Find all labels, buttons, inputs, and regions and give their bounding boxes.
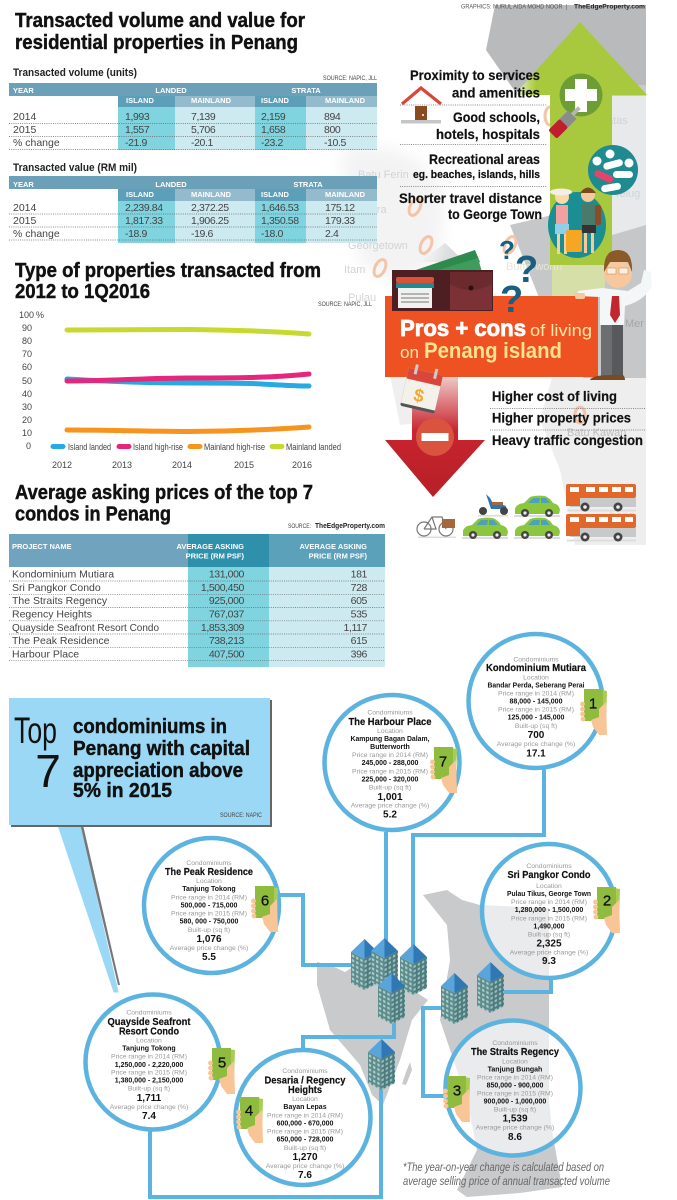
map background: pros and cons panel bbox=[340, 5, 646, 545]
heading: transacted volume and value bbox=[15, 9, 305, 54]
line chart: property types: 30 bbox=[22, 402, 32, 412]
circle 7: The Harbour Place bbox=[324, 695, 460, 830]
table: asking prices: PRICE (RM PSF) bbox=[186, 552, 244, 560]
circle 6: The Peak Residence: 6 bbox=[261, 892, 269, 910]
table: asking prices: The Straits Regency bbox=[12, 595, 108, 607]
heading: transacted volume and value: Transacted volume and value for bbox=[15, 9, 305, 32]
circle 3: The Straits Regency: 1,539 bbox=[502, 1114, 528, 1124]
panel: pros and cons banner: Penang island bbox=[424, 338, 562, 363]
callout: top 7 condominiums bbox=[9, 698, 272, 827]
icon: calendar: $ bbox=[412, 385, 426, 407]
table: asking prices: Harbour Place bbox=[12, 648, 79, 660]
line chart: property types: 50 bbox=[22, 376, 32, 386]
table: transacted value: MAINLAND bbox=[191, 190, 232, 199]
panel: pros and cons banner: Pros + cons bbox=[400, 315, 526, 341]
panel: pros and cons banner: of living bbox=[530, 321, 592, 340]
circle 5: Quayside Seafront Resort Condo bbox=[86, 994, 235, 1130]
map: Penang mainland and island bbox=[317, 890, 562, 1197]
table: asking prices: 396 bbox=[351, 648, 368, 660]
table: transacted value: -18.9 bbox=[125, 228, 147, 240]
map background: pros and cons panel: Batu Kawan bbox=[567, 427, 626, 439]
circle 2: Sri Pangkor Condo: Location bbox=[536, 883, 562, 890]
circle 4: Desaria / Regency Heights: Location bbox=[292, 1096, 318, 1103]
callout: top 7 condominiums: SOURCE: NAPIC bbox=[220, 812, 262, 819]
table: transacted volume bbox=[9, 67, 377, 150]
circle 7: The Harbour Place: The Harbour Place bbox=[348, 717, 432, 728]
callout: top 7 condominiums: Penang with capital bbox=[73, 738, 250, 760]
circle 4: Desaria / Regency Heights: Price range in 2015 (RM) bbox=[267, 1128, 343, 1136]
cons list: Higher property prices bbox=[492, 410, 631, 426]
table: transacted volume: -10.5 bbox=[324, 137, 346, 149]
line chart: property types: 40 bbox=[22, 389, 32, 399]
line chart: property types: 70 bbox=[22, 349, 32, 359]
icon: medical cross bbox=[560, 74, 602, 116]
circle 7: The Harbour Place: 5.2 bbox=[383, 810, 397, 820]
circle 4: Desaria / Regency Heights: Desaria / Regency bbox=[264, 1076, 346, 1086]
circle 5: Quayside Seafront Resort Condo: Tanjung Tokong bbox=[122, 1046, 176, 1052]
pros list: to George Town bbox=[448, 206, 542, 222]
pros list: Recreational areas bbox=[429, 151, 540, 167]
table: transacted volume: YEAR bbox=[13, 86, 34, 95]
table: asking prices: 407,500 bbox=[209, 648, 245, 660]
table: transacted value: ISLAND bbox=[261, 190, 290, 199]
circle 2: Sri Pangkor Condo: 2,325 bbox=[536, 938, 562, 950]
table: transacted value: -19.6 bbox=[191, 228, 213, 240]
circle 1: Kondominium Mutiara: Location bbox=[523, 674, 549, 682]
circle 1: Kondominium Mutiara: 88,000 - 145,000 bbox=[510, 698, 563, 706]
circle 2: Sri Pangkor Condo: Average price change (%) bbox=[510, 950, 588, 956]
circle 2: Sri Pangkor Condo: Pulau Tikus, George Town bbox=[507, 891, 591, 898]
circle 4: Desaria / Regency Heights: 1,270 bbox=[292, 1152, 318, 1163]
table: asking prices: Regency Heights bbox=[12, 608, 92, 620]
circle 1: Kondominium Mutiara: Price range in 2015 (RM) bbox=[498, 706, 574, 714]
circle 7: The Harbour Place: Location bbox=[377, 728, 403, 735]
table: asking prices: Sri Pangkor Condo bbox=[12, 582, 101, 594]
circle 3: The Straits Regency bbox=[443, 1020, 580, 1156]
panel: pros and cons banner bbox=[385, 296, 598, 377]
circle 4: Desaria / Regency Heights: Heights bbox=[288, 1085, 322, 1096]
callout: top 7 condominiums: condominiums in bbox=[73, 716, 227, 738]
callout: top 7 condominiums: 5% in 2015 bbox=[73, 780, 172, 802]
circle 2: Sri Pangkor Condo: Sri Pangkor Condo bbox=[508, 870, 590, 881]
circle 7: The Harbour Place: Butterworth bbox=[370, 744, 410, 751]
pros list: Good schools, bbox=[453, 109, 540, 125]
table: transacted value: % change bbox=[13, 228, 60, 240]
table: transacted volume: 2014 bbox=[13, 111, 37, 123]
circle 6: The Peak Residence: Tanjung Tokong bbox=[182, 886, 236, 893]
circle 4: Desaria / Regency Heights: 600,000 - 670,000 bbox=[277, 1120, 334, 1128]
footnote: *The year-on-year change is calculated based on bbox=[403, 1162, 604, 1174]
callout: top 7 condominiums: appreciation above bbox=[73, 760, 243, 782]
table: transacted volume: 1,993 bbox=[125, 111, 150, 123]
table: asking prices: 1,117 bbox=[344, 622, 368, 634]
table: asking prices: 605 bbox=[351, 595, 368, 607]
circle 5: Quayside Seafront Resort Condo: Price range in 2014 (RM) bbox=[111, 1054, 187, 1060]
table: asking prices: PROJECT NAME bbox=[12, 542, 72, 551]
circle 5: Quayside Seafront Resort Condo: Built-up (sq ft) bbox=[128, 1086, 170, 1092]
table: asking prices: 535 bbox=[351, 608, 368, 620]
table: transacted volume: 5,706 bbox=[191, 124, 216, 136]
pros list bbox=[399, 67, 547, 222]
line chart: property types: Island high-rise bbox=[133, 442, 183, 452]
circle 1: Kondominium Mutiara: 1 bbox=[589, 696, 597, 712]
table: asking prices: The Peak Residence bbox=[12, 635, 110, 647]
icon: question marks bbox=[499, 235, 538, 321]
circle 2: Sri Pangkor Condo: 2 bbox=[603, 892, 611, 910]
table: transacted value: 175.12 bbox=[325, 202, 355, 214]
table: transacted volume: MAINLAND bbox=[325, 96, 366, 105]
circle 5: Quayside Seafront Resort Condo: Average price change (%) bbox=[110, 1104, 188, 1111]
circle 6: The Peak Residence: The Peak Residence bbox=[165, 867, 253, 878]
footnote bbox=[403, 1162, 610, 1188]
pros list: eg. beaches, islands, hills bbox=[413, 169, 540, 181]
white fade on arrow wing bbox=[514, 71, 536, 95]
circle 5: Quayside Seafront Resort Condo: Quayside Seafront bbox=[108, 1017, 191, 1028]
circle 3: The Straits Regency: Price range in 2015 (RM) bbox=[477, 1090, 553, 1098]
table: transacted value: STRATA bbox=[293, 180, 323, 189]
table: transacted volume: 1,557 bbox=[125, 124, 150, 136]
circle 3: The Straits Regency: 8.6 bbox=[508, 1132, 522, 1143]
heading: type of properties: SOURCE: NAPIC, JLL bbox=[318, 301, 372, 308]
circle 6: The Peak Residence: Average price change (%) bbox=[170, 945, 248, 952]
table: transacted volume: -21.9 bbox=[125, 137, 147, 149]
connector lines bbox=[150, 768, 551, 1197]
circle 3: The Straits Regency: Average price change (%) bbox=[476, 1124, 554, 1132]
line chart: property types: 2015 bbox=[234, 460, 254, 470]
table: transacted value: LANDED bbox=[155, 180, 187, 189]
circle 4: Desaria / Regency Heights: Price range in 2014 (RM) bbox=[267, 1112, 343, 1120]
circle 2: Sri Pangkor Condo: 1,280,000 - 1,500,000 bbox=[515, 907, 583, 914]
circle 6: The Peak Residence: 5.5 bbox=[202, 952, 216, 963]
line chart: property types: 20 bbox=[22, 415, 32, 425]
table: transacted volume: 1,658 bbox=[261, 124, 286, 136]
line chart: property types: Island landed bbox=[68, 442, 111, 452]
table: transacted value: Transacted value (RM mil) bbox=[13, 162, 137, 174]
table: asking prices: 615 bbox=[351, 635, 368, 647]
credit line: TheEdgeProperty.com bbox=[574, 4, 645, 10]
circle 5: Quayside Seafront Resort Condo: 7.4 bbox=[142, 1111, 156, 1122]
icon: pills bbox=[588, 145, 638, 195]
circle 7: The Harbour Place: 1,001 bbox=[377, 792, 403, 803]
circle 3: The Straits Regency: 3 bbox=[453, 1082, 461, 1100]
circle 3: The Straits Regency: 900,000 - 1,000,000 bbox=[484, 1098, 546, 1106]
line chart: property types: 0 bbox=[26, 441, 31, 451]
circle 7: The Harbour Place: 7 bbox=[439, 754, 447, 770]
circle 1: Kondominium Mutiara: Built-up (sq ft) bbox=[515, 723, 557, 730]
circle 6: The Peak Residence: Condominiums bbox=[186, 860, 232, 867]
circle 7: The Harbour Place: 225,000 - 320,000 bbox=[362, 776, 419, 784]
table: transacted volume: 894 bbox=[324, 111, 341, 123]
credit line: GRAPHICS: NURUL AIDA MOHD NOOR | bbox=[461, 4, 567, 10]
table: transacted volume: ISLAND bbox=[261, 96, 290, 105]
circle 7: The Harbour Place: Built-up (sq ft) bbox=[369, 784, 411, 792]
heading: type of properties bbox=[15, 259, 372, 308]
icon: wallet with cash bbox=[392, 250, 493, 311]
line chart: property types: 10 bbox=[22, 428, 32, 438]
heading: average asking prices: condos in Penang bbox=[15, 502, 171, 526]
pros list: Shorter travel distance bbox=[399, 190, 542, 206]
table: asking prices: 181 bbox=[351, 568, 368, 580]
circle 4: Desaria / Regency Heights: Average price change (%) bbox=[266, 1163, 344, 1170]
table: asking prices: 1,500,450 bbox=[201, 582, 245, 594]
table: transacted value: 2014 bbox=[13, 202, 37, 214]
line chart: property types: 60 bbox=[22, 362, 32, 372]
circle 5: Quayside Seafront Resort Condo: 1,380,000 - 2,150,000 bbox=[115, 1078, 183, 1084]
table: transacted volume: SOURCE: NAPIC, JLL bbox=[323, 75, 377, 82]
circle 1: Kondominium Mutiara: 125,000 - 145,000 bbox=[508, 714, 565, 722]
callout: top 7 condominiums: 7 bbox=[35, 745, 61, 797]
icon: calendar bbox=[400, 363, 444, 414]
table: transacted value: 2,239.84 bbox=[125, 202, 163, 214]
table: transacted value: -18.0 bbox=[261, 228, 283, 240]
cons list: Higher cost of living bbox=[492, 388, 617, 404]
table: asking prices: AVERAGE ASKING bbox=[176, 542, 244, 551]
circle 4: Desaria / Regency Heights: 7.6 bbox=[298, 1170, 312, 1181]
circle 3: The Straits Regency: 850,000 - 900,000 bbox=[487, 1082, 544, 1090]
circle 7: The Harbour Place: Price range in 2015 (RM) bbox=[352, 768, 428, 776]
line chart: property types: 2013 bbox=[112, 460, 132, 470]
line chart: property types: Mainland landed bbox=[286, 442, 341, 452]
buildings bbox=[351, 938, 504, 1090]
circle 2: Sri Pangkor Condo: Price range in 2015 (RM) bbox=[511, 916, 587, 922]
icon: question marks: ? bbox=[499, 235, 515, 265]
heading: average asking prices bbox=[15, 481, 385, 530]
circle 2: Sri Pangkor Condo: Condominiums bbox=[526, 863, 572, 870]
circle 5: Quayside Seafront Resort Condo: Resort Condo bbox=[119, 1026, 179, 1038]
circle 3: The Straits Regency: Location bbox=[502, 1058, 528, 1066]
table: transacted volume: 7,139 bbox=[191, 111, 216, 123]
map background: pros and cons panel: atas bbox=[607, 115, 628, 127]
line chart: property types: 2016 bbox=[292, 460, 312, 470]
table: transacted volume: 2015 bbox=[13, 124, 37, 136]
cons list: Heavy traffic congestion bbox=[492, 432, 643, 448]
circle 1: Kondominium Mutiara: Bandar Perda, Seberang Perai bbox=[488, 682, 585, 690]
circle 4: Desaria / Regency Heights: Bayan Lepas bbox=[283, 1104, 327, 1111]
circle 6: The Peak Residence: Built-up (sq ft) bbox=[188, 927, 230, 934]
circle 4: Desaria / Regency Heights bbox=[236, 1050, 370, 1185]
table: transacted value: 179.33 bbox=[325, 215, 355, 227]
circle 1: Kondominium Mutiara: Condominiums bbox=[513, 656, 559, 664]
line chart: property types: % bbox=[36, 310, 44, 320]
table: transacted volume: STRATA bbox=[291, 86, 321, 95]
circle 6: The Peak Residence: Location bbox=[196, 878, 222, 885]
circle 5: Quayside Seafront Resort Condo: Location bbox=[136, 1038, 162, 1044]
table: asking prices: 1,853,309 bbox=[201, 622, 245, 634]
icon: tourists bbox=[548, 188, 606, 258]
heading: average asking prices: TheEdgeProperty.com bbox=[315, 523, 385, 530]
icon: question marks: ? bbox=[500, 279, 523, 321]
map background: pros and cons panel: Telug bbox=[614, 188, 640, 200]
callout: top 7 condominiums: Top bbox=[14, 710, 57, 751]
table: transacted value: 1,350.58 bbox=[261, 215, 299, 227]
red down arrow bbox=[385, 377, 485, 497]
circle 1: Kondominium Mutiara: Price range in 2014 (RM) bbox=[498, 690, 574, 698]
heading: average asking prices: SOURCE: bbox=[288, 523, 311, 530]
table: transacted value: 1,817.33 bbox=[125, 215, 163, 227]
table: transacted value: YEAR bbox=[13, 180, 34, 189]
heading: transacted volume and value: residential properties in Penang bbox=[15, 31, 298, 54]
icon: minus sign bbox=[416, 418, 454, 456]
table: asking prices: PRICE (RM PSF) bbox=[309, 552, 367, 560]
map background: pros and cons panel: Pulau bbox=[348, 292, 376, 304]
circle 4: Desaria / Regency Heights: Built-up (sq ft) bbox=[284, 1145, 326, 1152]
table: asking prices: Quayside Seafront Resort Condo bbox=[12, 622, 159, 634]
line chart: property types: 2014 bbox=[172, 460, 192, 470]
circle 6: The Peak Residence: 1,076 bbox=[196, 934, 222, 945]
table: transacted volume: MAINLAND bbox=[191, 96, 232, 105]
pros list: and amenities bbox=[452, 84, 540, 100]
line chart: property types: 2012 bbox=[52, 460, 72, 470]
circle 3: The Straits Regency: Price range in 2014 (RM) bbox=[477, 1074, 553, 1082]
circle 1: Kondominium Mutiara: 17.1 bbox=[526, 748, 546, 760]
circle 1: Kondominium Mutiara: 700 bbox=[528, 730, 545, 741]
circle 6: The Peak Residence: Price range in 2015 (RM) bbox=[171, 910, 247, 918]
green up arrow bbox=[514, 22, 647, 265]
table: transacted value: MAINLAND bbox=[325, 190, 366, 199]
circle 6: The Peak Residence bbox=[144, 838, 279, 973]
table: transacted volume: % change bbox=[13, 137, 60, 149]
circle 3: The Straits Regency: Tanjung Bungah bbox=[488, 1066, 542, 1074]
circle 3: The Straits Regency: Condominiums bbox=[492, 1040, 538, 1047]
circle 2: Sri Pangkor Condo: 9.3 bbox=[542, 956, 556, 967]
map background: pros and cons panel: Georgetown bbox=[348, 240, 408, 252]
circle 1: Kondominium Mutiara: Kondominium Mutiara bbox=[486, 663, 586, 674]
credit line bbox=[461, 4, 645, 10]
table: asking prices: 925,000 bbox=[209, 595, 245, 607]
circle 3: The Straits Regency: Built-up (sq ft) bbox=[494, 1106, 536, 1114]
table: asking prices: AVERAGE ASKING bbox=[299, 542, 367, 551]
icon: syringe bbox=[548, 103, 584, 139]
circle 7: The Harbour Place: Kampung Bagan Dalam, bbox=[350, 736, 430, 743]
callout pointer bbox=[58, 825, 118, 992]
circle 4: Desaria / Regency Heights: Condominiums bbox=[282, 1068, 328, 1075]
map background: pros and cons panel: Batu Ferin bbox=[358, 169, 409, 181]
circle 5: Quayside Seafront Resort Condo: 1,250,000 - 2,220,000 bbox=[115, 1062, 183, 1069]
table: transacted volume: 800 bbox=[324, 124, 341, 136]
map background: pros and cons panel: Itam bbox=[344, 264, 365, 276]
table: asking prices: 738,213 bbox=[209, 635, 245, 647]
table: transacted value: 1,646.53 bbox=[261, 202, 299, 214]
table: asking prices: Kondominium Mutiara bbox=[12, 568, 114, 580]
circle 6: The Peak Residence: 580, 000 - 750,000 bbox=[180, 918, 238, 926]
table: transacted value: 2,372.25 bbox=[191, 202, 229, 214]
circle 7: The Harbour Place: Average price change (%) bbox=[351, 802, 429, 810]
pros list: hotels, hospitals bbox=[436, 126, 540, 142]
circle 4: Desaria / Regency Heights: 4 bbox=[245, 1102, 253, 1120]
line chart: property types: Mainland high-rise bbox=[204, 442, 265, 452]
icon: house bbox=[401, 88, 441, 124]
circle 5: Quayside Seafront Resort Condo: Price range in 2015 (RM) bbox=[111, 1070, 187, 1076]
table: transacted volume: -20.1 bbox=[191, 137, 213, 149]
map background: pros and cons panel: Bendera bbox=[345, 204, 387, 216]
line chart: property types: 100 bbox=[19, 310, 34, 320]
circle 5: Quayside Seafront Resort Condo: Condominiums bbox=[126, 1010, 172, 1016]
map background: pros and cons panel: Butterworth bbox=[506, 261, 562, 273]
table: transacted volume: -23.2 bbox=[261, 137, 283, 149]
circle 1: Kondominium Mutiara bbox=[468, 634, 607, 768]
heading: type of properties: 2012 to 1Q2016 bbox=[15, 280, 150, 303]
table: asking prices bbox=[9, 534, 385, 667]
panel: pros and cons banner: on bbox=[400, 343, 419, 362]
table: transacted value: ISLAND bbox=[126, 190, 154, 199]
table: transacted value bbox=[9, 162, 377, 243]
circle 5: Quayside Seafront Resort Condo: 1,711 bbox=[137, 1093, 162, 1104]
table: transacted volume: LANDED bbox=[155, 86, 187, 95]
table: transacted value: 2015 bbox=[13, 215, 37, 227]
circle 5: Quayside Seafront Resort Condo: 5 bbox=[218, 1054, 226, 1072]
line chart: property types bbox=[19, 310, 341, 470]
pros list: Proximity to services bbox=[410, 67, 540, 83]
table: transacted volume: 2,159 bbox=[261, 111, 286, 123]
circle 4: Desaria / Regency Heights: 650,000 - 728,000 bbox=[277, 1136, 334, 1144]
circle 2: Sri Pangkor Condo bbox=[482, 844, 620, 978]
circle 2: Sri Pangkor Condo: 1,490,000 bbox=[533, 924, 565, 930]
heading: average asking prices: Average asking prices of the top 7 bbox=[15, 481, 313, 504]
map background: pros and cons panel: bong bbox=[610, 510, 634, 522]
heading: type of properties: Type of properties transacted from bbox=[15, 259, 321, 282]
map background: pros and cons panel: Mer bbox=[625, 318, 644, 330]
icon: businessman bbox=[575, 250, 652, 380]
circle 7: The Harbour Place: 245,000 - 288,000 bbox=[362, 760, 419, 767]
circle 7: The Harbour Place: Price range in 2014 (RM) bbox=[352, 752, 428, 759]
circle 6: The Peak Residence: Price range in 2014 (RM) bbox=[171, 894, 247, 902]
table: asking prices: 131,000 bbox=[209, 568, 245, 580]
line chart: property types: 90 bbox=[22, 323, 32, 333]
line chart: property types: 80 bbox=[22, 336, 32, 346]
table: transacted volume: ISLAND bbox=[126, 96, 154, 105]
circle 6: The Peak Residence: 500,000 - 715,000 bbox=[181, 902, 238, 910]
table: transacted value: 2.4 bbox=[325, 228, 339, 240]
circle 7: The Harbour Place: Condominiums bbox=[367, 710, 413, 716]
table: asking prices: 767,037 bbox=[209, 608, 245, 620]
icon: vehicles bbox=[417, 484, 636, 542]
table: asking prices: 728 bbox=[351, 582, 368, 594]
circle 3: The Straits Regency: The Straits Regency bbox=[471, 1047, 559, 1058]
circle 1: Kondominium Mutiara: Average price change (%) bbox=[497, 741, 575, 748]
circle 2: Sri Pangkor Condo: Price range in 2014 (RM) bbox=[511, 899, 587, 906]
table: transacted value: 1,906.25 bbox=[191, 215, 229, 227]
table: transacted volume: Transacted volume (units) bbox=[13, 67, 137, 79]
footnote: average selling price of annual transacted volume bbox=[403, 1176, 610, 1188]
cons list bbox=[490, 388, 645, 448]
icon: question marks: ? bbox=[515, 249, 538, 291]
pointer shadow bbox=[80, 825, 120, 985]
circle 2: Sri Pangkor Condo: Built-up (sq ft) bbox=[528, 932, 570, 938]
